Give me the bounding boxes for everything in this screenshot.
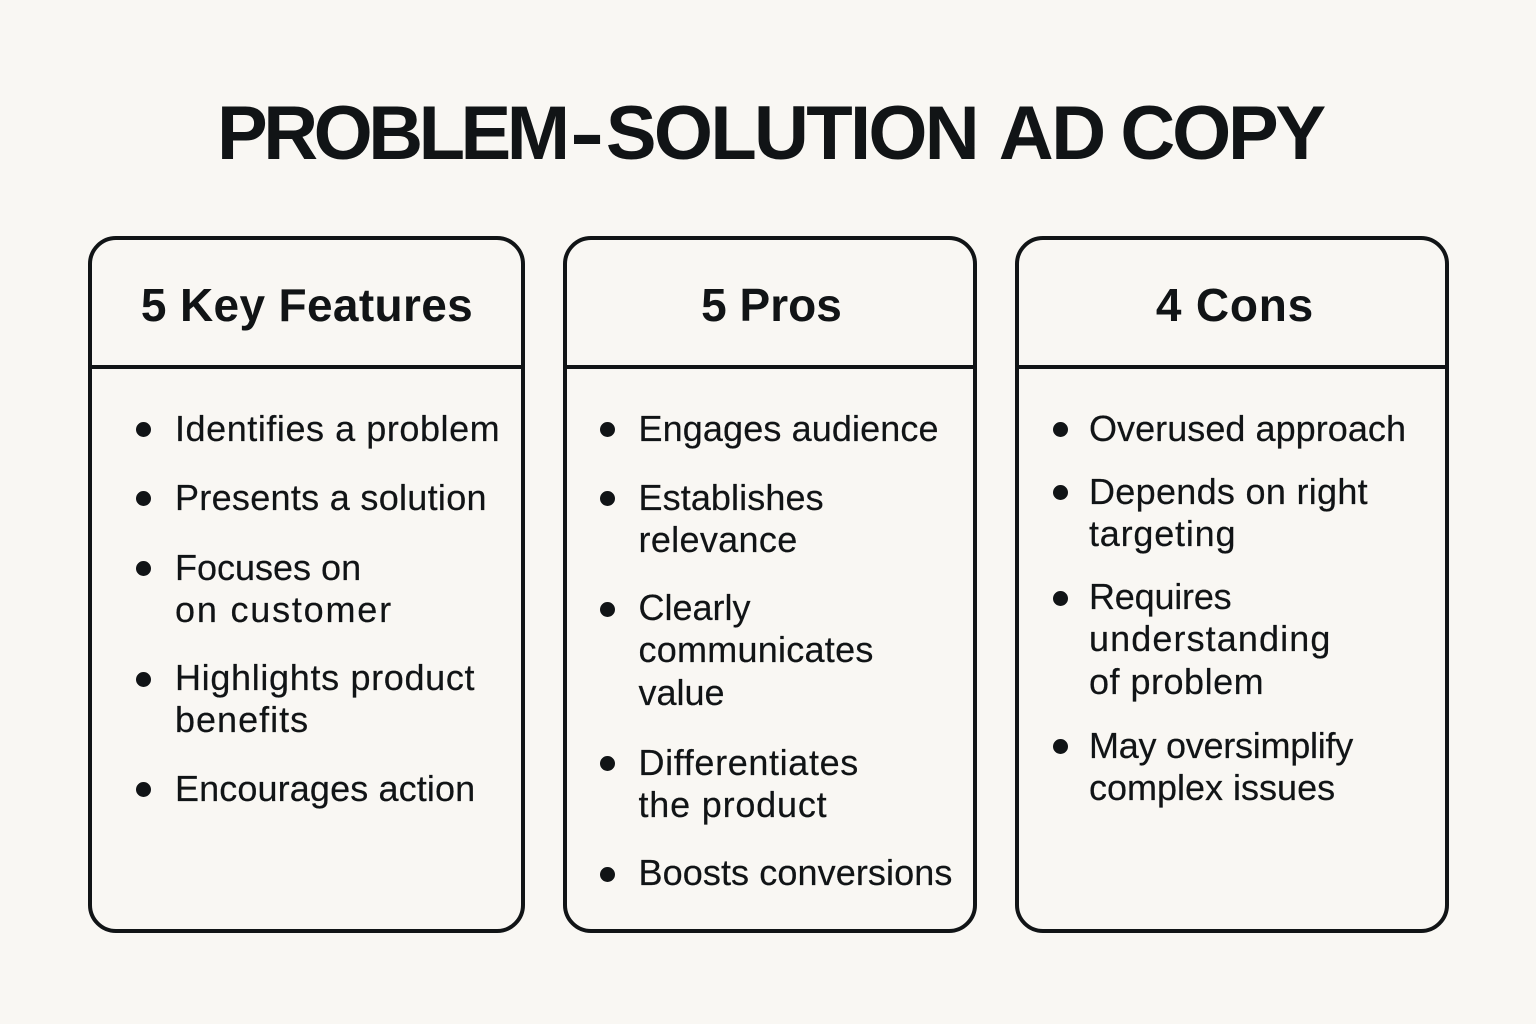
list: features: on customer xyxy=(175,588,393,630)
list: pros: Engages audience xyxy=(638,408,939,448)
heading: 5 pros: 5 Pros xyxy=(701,279,842,331)
list: pros: Differentiates xyxy=(638,742,859,782)
list: features: benefits xyxy=(175,698,309,740)
list: cons: Requires xyxy=(1089,576,1231,616)
list: pros: Boosts conversions xyxy=(638,852,952,892)
list: cons: of problem xyxy=(1089,661,1264,702)
heading: 5 key features: 5 Key Features xyxy=(141,279,473,331)
list: pros: relevance xyxy=(638,518,798,560)
list: cons: complex issues xyxy=(1089,766,1335,808)
list: features: Identifies a problem xyxy=(175,408,500,448)
panel: cons xyxy=(1015,236,1449,932)
list: pros: communicates xyxy=(638,629,874,670)
list: features: Highlights product xyxy=(175,656,475,698)
list: features: Encourages action xyxy=(175,768,475,808)
list: pros xyxy=(600,408,952,892)
list: cons: Depends on right xyxy=(1089,470,1368,512)
panel: pros xyxy=(563,236,977,932)
heading: 4 cons: 4 Cons xyxy=(1156,279,1314,331)
list: cons: targeting xyxy=(1089,512,1236,554)
list: features: Focuses on xyxy=(175,546,361,588)
title: PROBLEM SOLUTION AD COPY xyxy=(217,91,1323,176)
list: cons: Overused approach xyxy=(1089,408,1406,448)
panel: key features xyxy=(88,236,524,932)
list: pros: Establishes xyxy=(638,476,824,518)
list: pros: Clearly xyxy=(638,586,751,628)
list: cons: May oversimplify xyxy=(1089,724,1353,766)
list: cons xyxy=(1053,408,1406,808)
list: features xyxy=(136,408,500,809)
list: pros: the product xyxy=(638,784,827,824)
list: cons: understanding xyxy=(1089,618,1331,659)
title: - xyxy=(569,91,600,176)
list: pros: value xyxy=(638,672,725,713)
list: features: Presents a solution xyxy=(175,476,487,518)
